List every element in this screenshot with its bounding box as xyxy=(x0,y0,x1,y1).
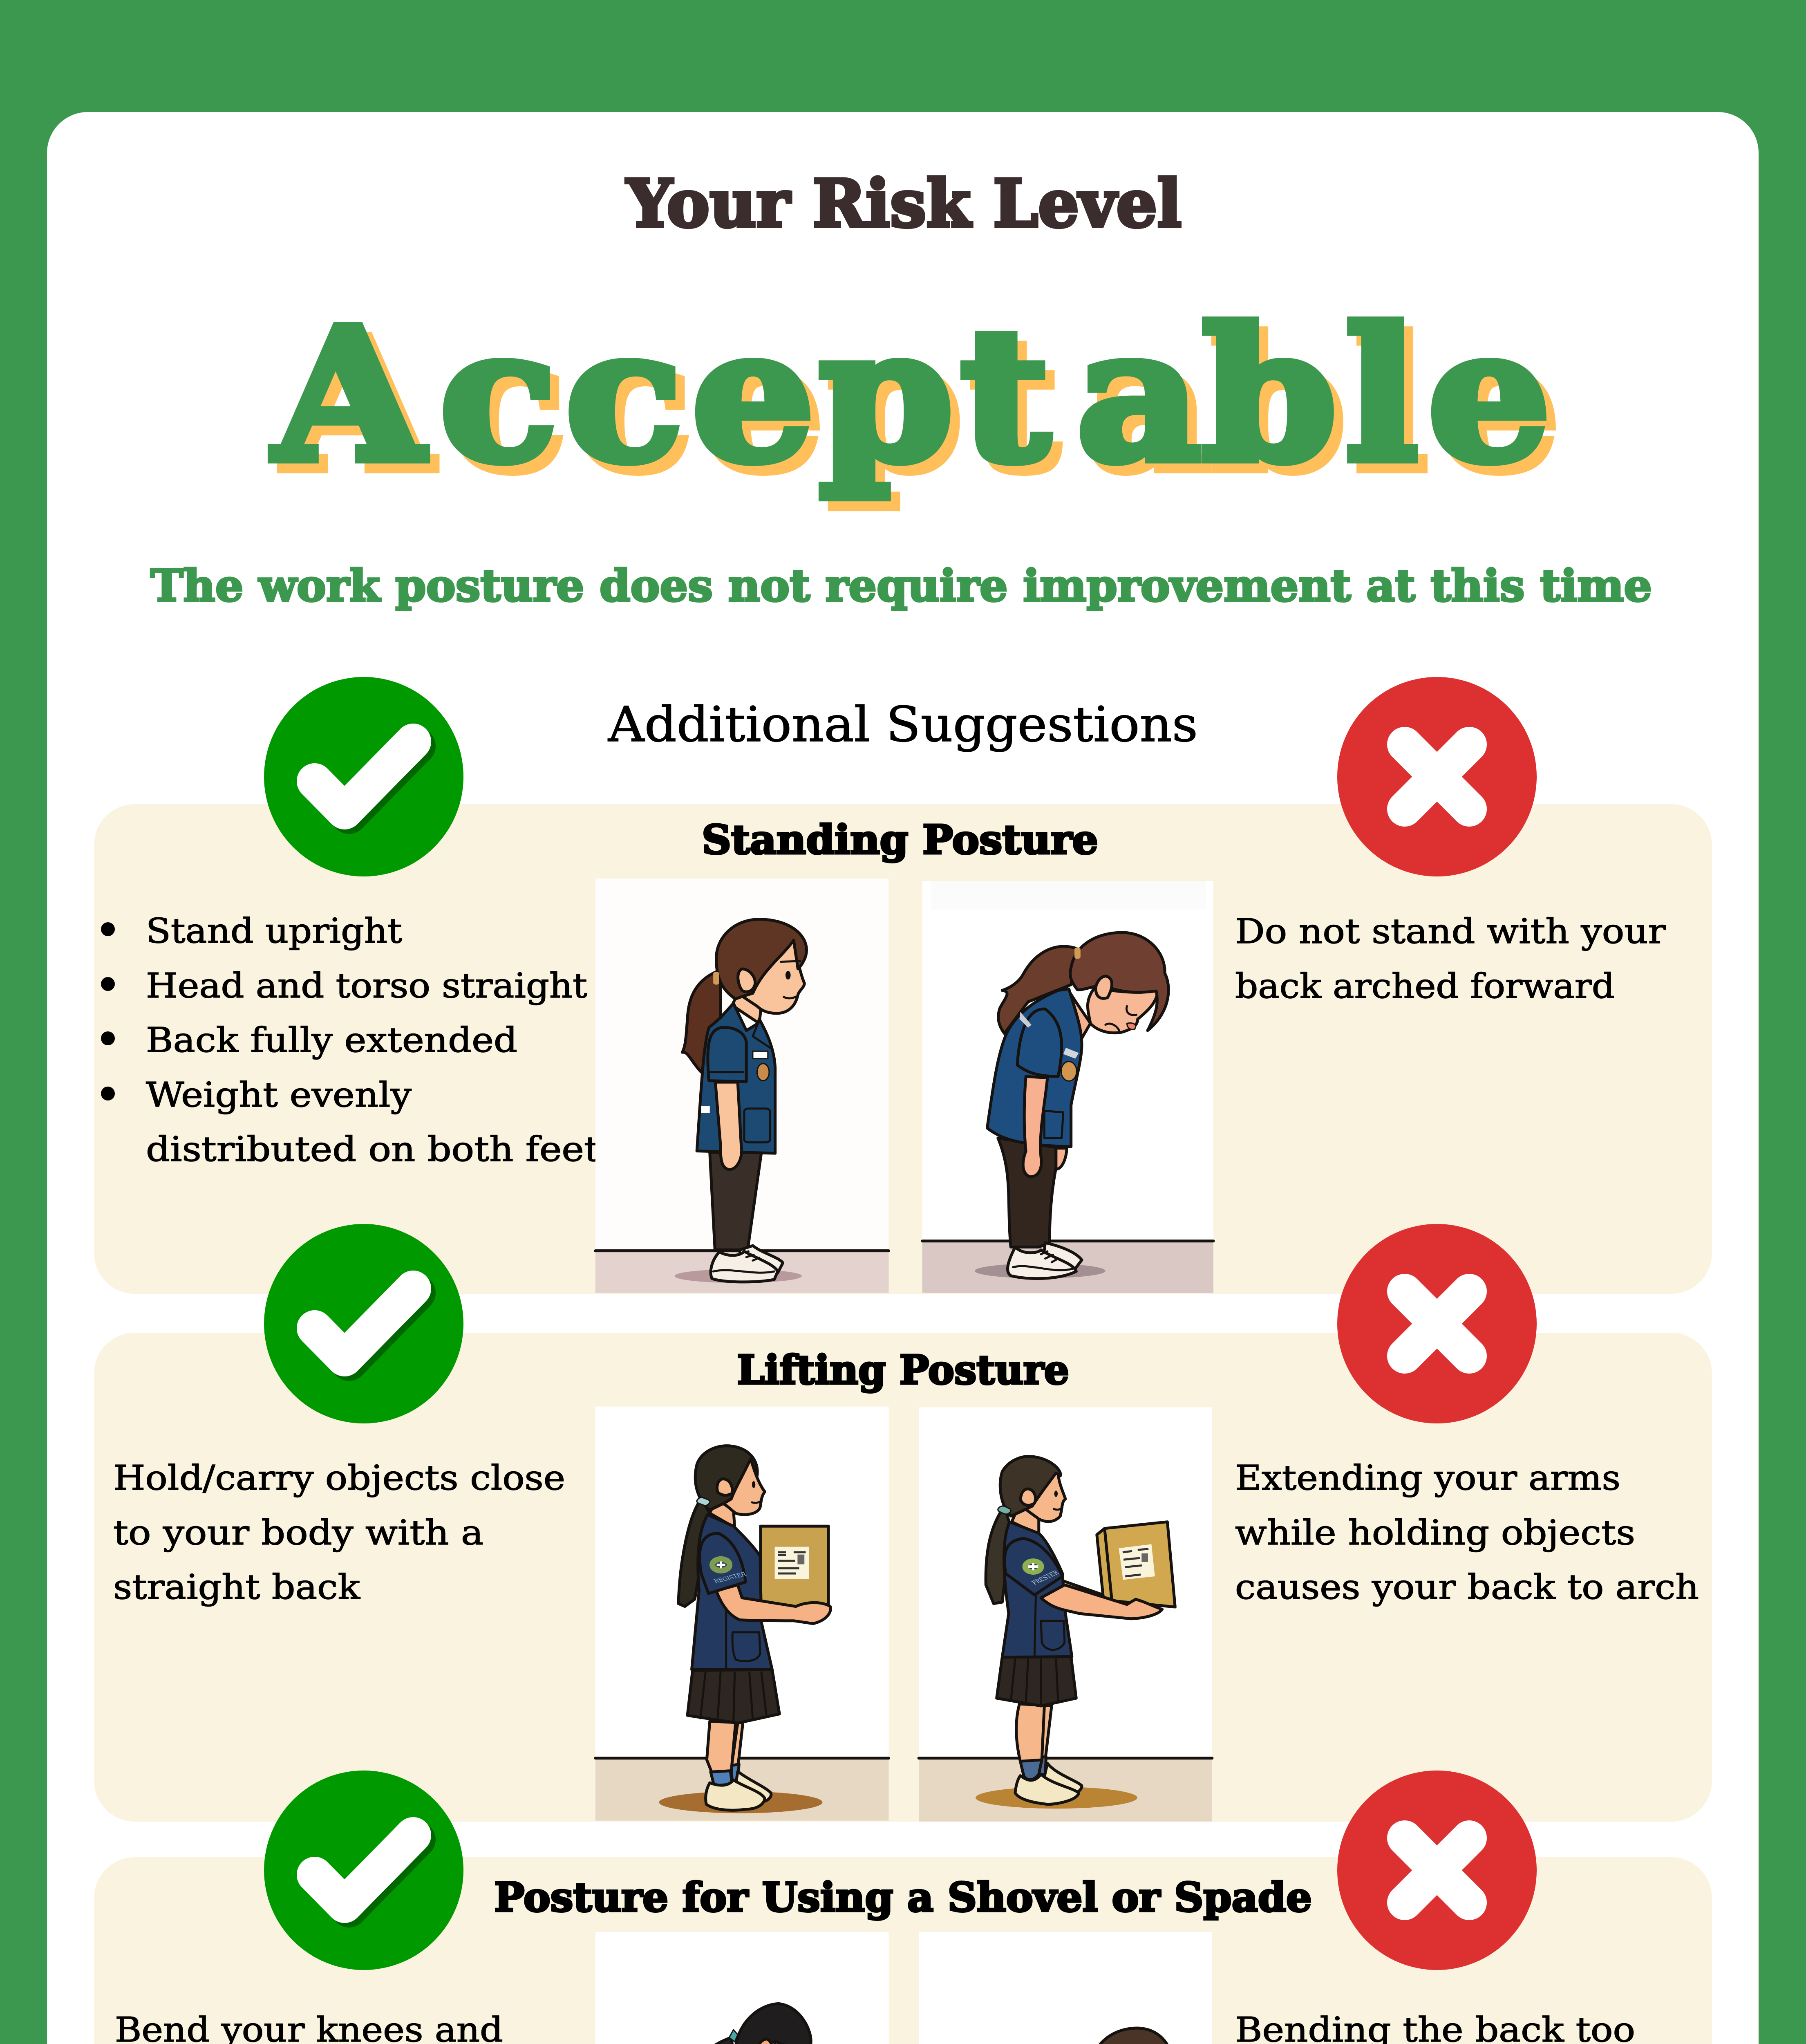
icon: cross xyxy=(1337,1224,1537,1423)
illustration: correct shovel xyxy=(595,1932,888,2044)
heading: additional suggestions: Additional Suggestions xyxy=(608,696,1198,753)
do text: to your body with a xyxy=(113,1513,483,1553)
dont text: Extending your arms xyxy=(1235,1458,1620,1498)
title: acceptable: Acceptable xyxy=(280,298,1560,512)
panel title: Posture for Using a Shovel or Spade xyxy=(494,1874,1312,1921)
dont text: while holding objects xyxy=(1235,1513,1635,1553)
illustration: correct standing xyxy=(595,879,888,1293)
dont text xyxy=(1235,1458,1699,1607)
do list: Back fully extended xyxy=(146,1020,517,1060)
panel title: Lifting Posture xyxy=(737,1347,1069,1393)
illustration: correct lifting: REGISTER xyxy=(713,1571,748,1585)
icon: cross xyxy=(1337,677,1537,876)
do text: Hold/carry objects close xyxy=(113,1458,565,1498)
illustration: correct lifting xyxy=(595,1407,888,1821)
do list: Stand upright xyxy=(146,911,402,951)
illustration: incorrect lifting: PRESTER xyxy=(1030,1569,1061,1586)
panel: lifting posture xyxy=(94,1224,1712,1822)
do list: distributed on both feet xyxy=(146,1130,599,1169)
do list: Head and torso straight xyxy=(146,966,587,1006)
icon: check xyxy=(264,1224,463,1423)
do list: Weight evenly xyxy=(146,1075,412,1115)
illustration: incorrect shovel xyxy=(919,1932,1212,2044)
do text: straight back xyxy=(113,1567,360,1607)
do list xyxy=(101,911,599,1169)
dont text: Do not stand with your xyxy=(1235,912,1666,951)
dont text: causes your back to arch xyxy=(1235,1567,1699,1607)
heading: your risk level: Your Risk Level xyxy=(626,165,1182,242)
icon: check xyxy=(264,1771,463,1970)
panel: shovel posture xyxy=(94,1771,1712,2044)
icon: check xyxy=(264,677,463,876)
illustration: incorrect lifting xyxy=(919,1407,1212,1822)
illustration: incorrect standing xyxy=(922,881,1213,1293)
dont text: back arched forward xyxy=(1235,966,1615,1006)
panel: standing posture xyxy=(94,677,1712,1294)
dont text xyxy=(1235,912,1666,1006)
subtitle: The work posture does not require improvement at this time xyxy=(150,560,1652,612)
panel title: Standing Posture xyxy=(702,816,1098,863)
do text xyxy=(113,1458,565,1607)
title: acceptable: Acceptable xyxy=(271,289,1551,502)
icon: cross xyxy=(1337,1771,1537,1970)
